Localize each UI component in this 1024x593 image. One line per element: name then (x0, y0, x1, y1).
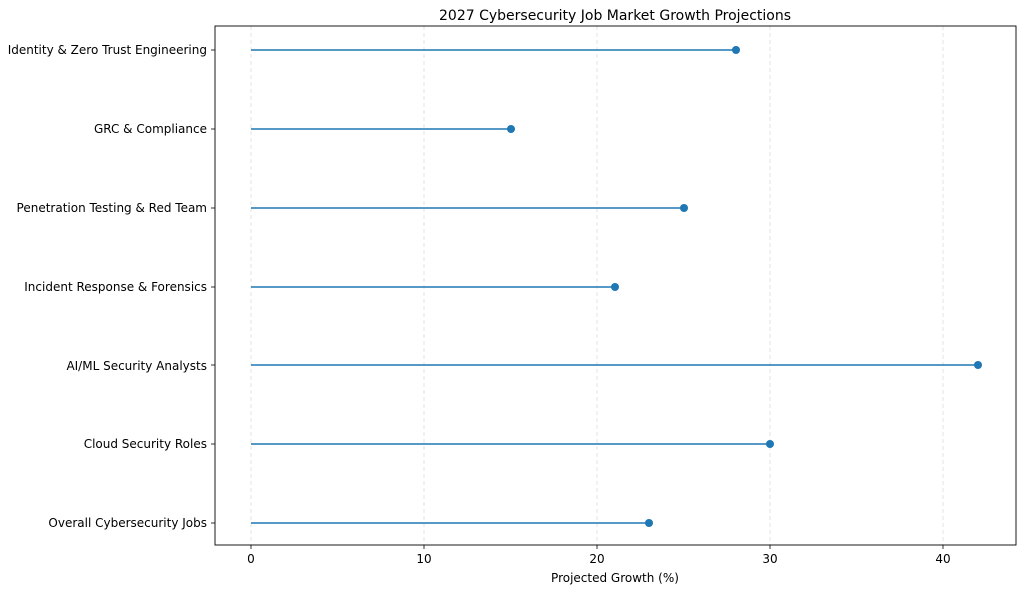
y axis labels: Incident Response & Forensics (24, 280, 207, 294)
lollipop stems and markers (251, 46, 982, 527)
y axis labels: Penetration Testing & Red Team (17, 201, 207, 215)
x axis tick labels (247, 552, 951, 566)
y axis labels: Cloud Security Roles (84, 437, 207, 451)
x axis tick labels: 40 (935, 552, 951, 566)
x axis tick labels: 20 (589, 552, 605, 566)
y axis labels: AI/ML Security Analysts (66, 359, 207, 373)
title: 2027 Cybersecurity Job Market Growth Projections (439, 8, 791, 24)
x axis label: Projected Growth (%) (551, 571, 679, 585)
y axis labels: Identity & Zero Trust Engineering (8, 43, 207, 57)
x axis tick labels: 30 (762, 552, 778, 566)
y axis labels (8, 43, 207, 530)
x axis tick labels: 10 (416, 552, 432, 566)
y axis labels: GRC & Compliance (94, 122, 207, 136)
y axis labels: Overall Cybersecurity Jobs (48, 516, 207, 530)
x axis tick labels: 0 (247, 552, 255, 566)
